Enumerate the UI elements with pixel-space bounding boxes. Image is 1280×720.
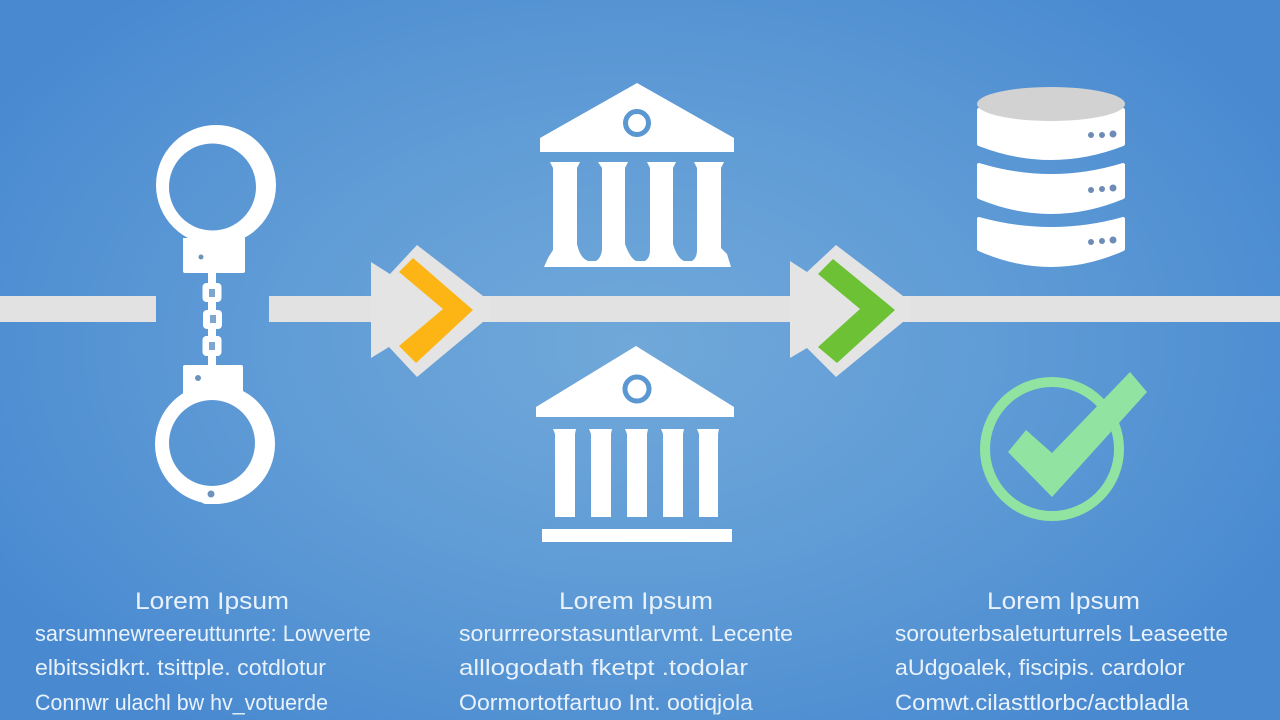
body text: alllogodath fketpt .todolar — [459, 655, 748, 680]
bottom cuff — [155, 365, 275, 504]
flow line: left segment — [0, 296, 156, 322]
body text: sorurrreorstasuntlarvmt. Lecente — [459, 621, 793, 646]
body text: aUdgoalek, fiscipis. cardolor — [895, 655, 1185, 680]
icon: green check mark in circle — [985, 372, 1147, 516]
top disk — [977, 87, 1125, 158]
roof — [540, 83, 734, 152]
flow line: middle segment — [269, 296, 799, 322]
body text: sarsumnewreereuttunrte: Lowverte — [35, 621, 371, 646]
flow line: right segment — [890, 296, 1280, 322]
text block: column 1 — [35, 588, 371, 715]
body text: elbitssidkrt. tsittple. cotdlotur — [35, 655, 326, 680]
heading: Lorem Ipsum — [987, 588, 1140, 615]
body text — [35, 621, 371, 715]
icon: database stack — [977, 87, 1125, 265]
columns — [553, 429, 719, 517]
text block: column 2 — [459, 588, 793, 715]
roof medallion — [625, 377, 649, 401]
middle disk — [979, 165, 1123, 212]
body text: sorouterbsaleturturrels Leaseette — [895, 621, 1228, 646]
roof medallion — [626, 112, 648, 134]
icon: bank building bottom — [536, 346, 734, 542]
roof — [536, 346, 734, 417]
body text: Oormortotfartuo Int. ootiqjola — [459, 690, 754, 715]
chain — [202, 272, 222, 366]
icon: bank building top — [540, 83, 734, 267]
arrow: orange chevron — [371, 245, 490, 377]
body text — [459, 621, 793, 715]
heading: Lorem Ipsum — [559, 588, 713, 615]
icon: handcuffs — [155, 125, 276, 504]
body text: Connwr ulachl bw hv_votuerde — [35, 690, 328, 715]
body text — [895, 621, 1228, 715]
base — [542, 529, 732, 542]
heading: Lorem Ipsum — [135, 588, 289, 615]
arrow: green chevron — [790, 245, 910, 377]
text block: column 3 — [895, 588, 1228, 715]
body text: Comwt.cilasttlorbc/actbladla — [895, 690, 1190, 715]
columns — [544, 162, 731, 267]
bottom disk — [979, 219, 1123, 265]
top cuff — [156, 125, 276, 273]
